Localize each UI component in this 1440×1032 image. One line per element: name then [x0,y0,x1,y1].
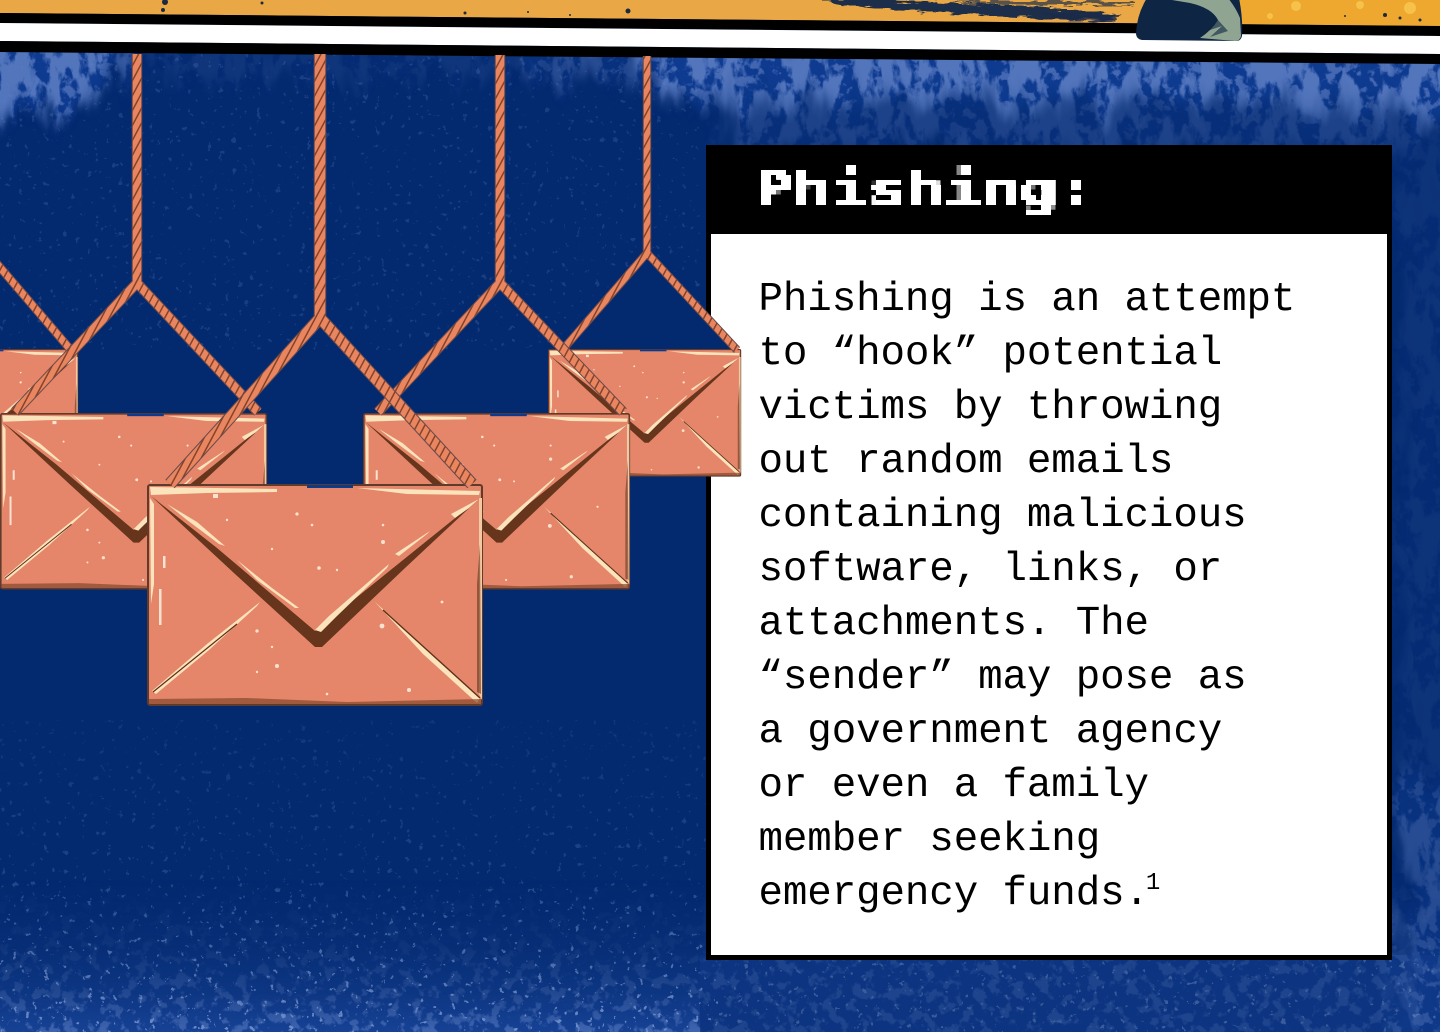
panel heading: Phishing: [755,162,1095,217]
rope: left medium [15,54,258,412]
top comic strip band [0,0,1440,64]
icon: hooded figure bottom [1136,0,1242,41]
panel body [711,234,1387,955]
orange band [0,0,1440,26]
specks [0,52,720,1032]
brush streak [815,0,1135,22]
bottom wash [0,906,1440,1032]
envelope group: far left small [0,258,78,476]
envelope group: left medium [1,54,266,589]
rope: right medium [378,55,623,412]
envelope group: right medium [364,55,629,589]
rope: far left [0,258,70,349]
envelope group: large front [148,54,482,705]
rope: right small [565,56,737,350]
black and white stripes [0,13,1440,64]
panel: phishing definition [706,145,1392,960]
envelope group: right small [549,56,741,476]
definition text: Phishing is an attempt to “hook” potential victims by throwing out random emails containing malicious software, links, or attachments. The “sender” may pose as a government agency or even a family member seeking emergency funds.1 [758,277,1295,917]
rope: large front [170,54,472,484]
